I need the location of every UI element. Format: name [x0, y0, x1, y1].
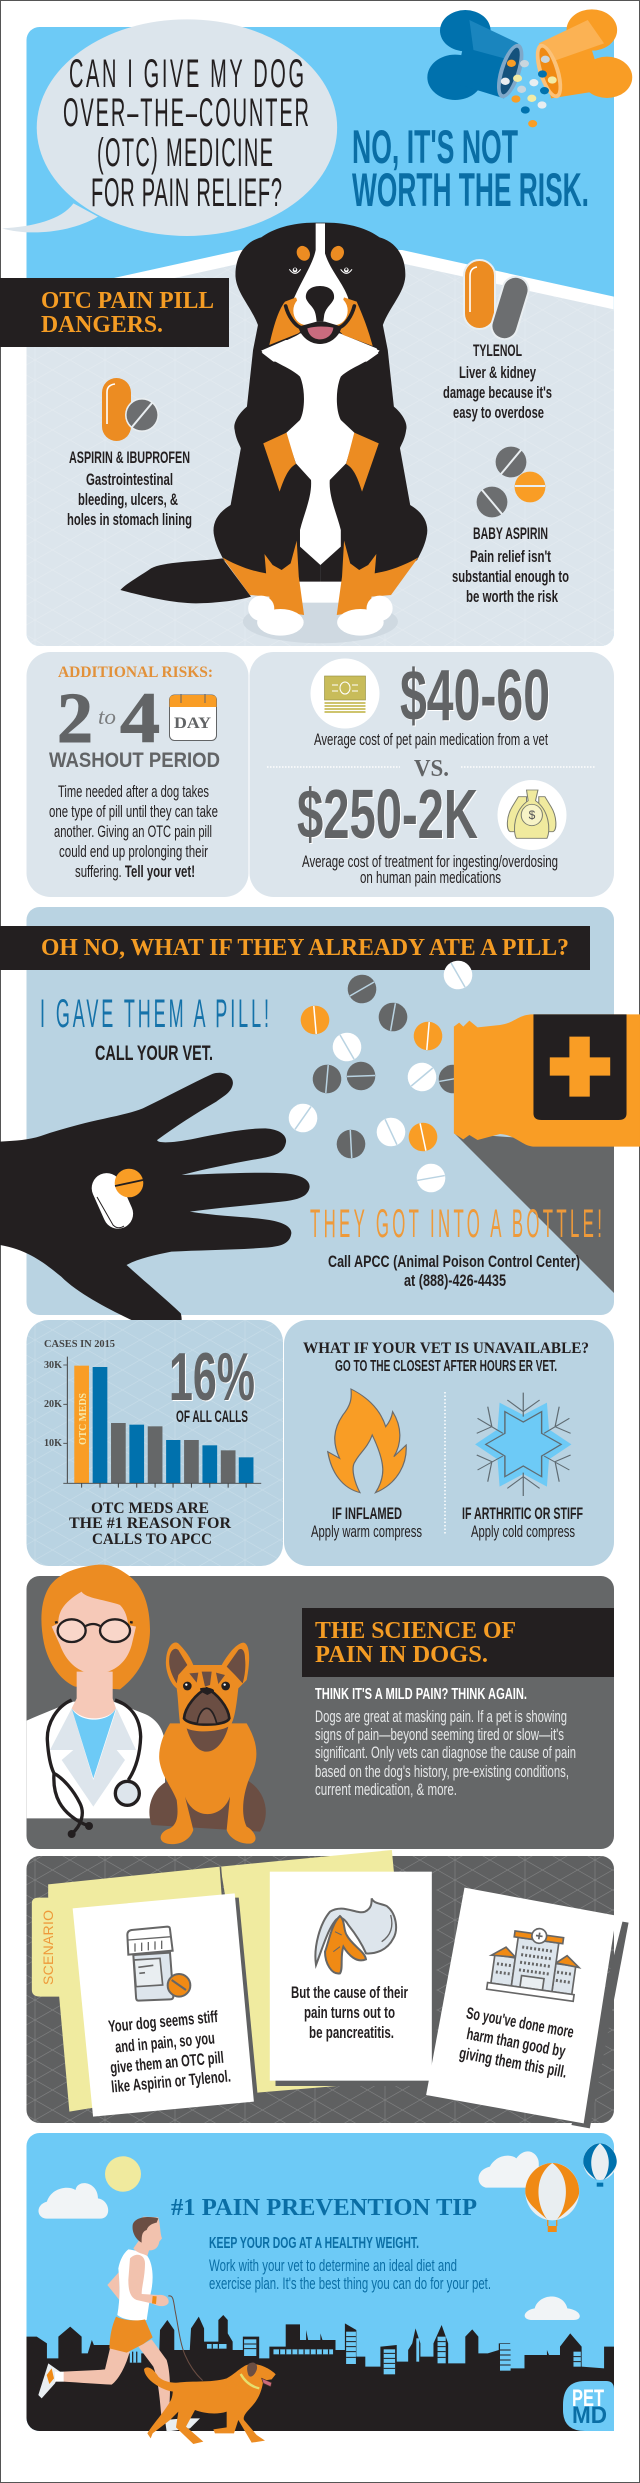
text: baby aspirin: BABY ASPIRIN: [473, 525, 548, 543]
icon: snowflake: [475, 1393, 571, 1496]
speech bubble with question: [2, 19, 337, 236]
stat: 2 to 4 day: to: [98, 704, 116, 729]
illustration: pill bottle on its side: [454, 1014, 640, 1147]
text: aspirin and ibuprofen: ASPIRIN & IBUPROFEN: [69, 449, 190, 467]
illustration: veterinarian: [27, 1565, 165, 1838]
stat: 2 to 4 day: 2: [57, 678, 93, 758]
heading: washout period: WASHOUT PERIOD: [49, 749, 220, 772]
panel: what if they already ate a pill: [0, 907, 640, 1333]
text: call APCC: [328, 1253, 580, 1290]
text: baby aspirin: be worth the risk: [466, 588, 559, 606]
stat: 40 to 60 dollars: $40-60: [400, 656, 550, 736]
stat: 2 to 4 day: 4: [120, 678, 160, 758]
stat: 2 to 4 day: DAY: [174, 715, 211, 732]
speech bubble with question: CAN I GIVE MY DOG: [69, 50, 304, 96]
text: washout description: suffering. Tell your vet!: [75, 863, 195, 881]
text: healthy weight tip: [209, 2235, 491, 2293]
icon: stomach and pancreas: [315, 1898, 396, 1973]
card: pancreatitis: But the cause of their: [291, 1984, 408, 2002]
icon: money bags: [498, 780, 566, 850]
text: Tylenol: damage because it's: [443, 384, 552, 402]
banner: OTC pain pill dangers: OTC PAIN PILL: [41, 288, 214, 314]
panel: additional risks washout period: [26, 652, 248, 897]
logo: PetMD: MD: [572, 2402, 607, 2429]
text: baby aspirin: substantial enough to: [452, 568, 569, 586]
text: Tylenol: TYLENOL: [473, 342, 522, 360]
speech bubble with question: FOR PAIN RELIEF?: [91, 169, 282, 215]
illustration: runner with dog on leash: [38, 2217, 276, 2444]
bar chart: cases in 2015: CASES IN 2015: [44, 1339, 115, 1350]
text: number one reason: THE #1 REASON FOR: [69, 1515, 232, 1532]
icon: hospital: [487, 1922, 584, 2001]
text: healthy weight tip: KEEP YOUR DOG AT A HEALTHY WEIGHT.: [209, 2235, 419, 2252]
text: treatment cost: [302, 853, 558, 887]
text: number one reason: OTC MEDS ARE: [91, 1500, 209, 1517]
speech bubble with question: OVER–THE–COUNTER: [63, 89, 309, 135]
banner: science of pain: PAIN IN DOGS.: [315, 1642, 488, 1668]
logo: PetMD: PET: [572, 2385, 604, 2412]
bar chart: cases in 2015: 30K: [44, 1360, 63, 1371]
spilled pills: [283, 955, 478, 1195]
text: healthy weight tip: Work with your vet to determine an ideal diet and: [209, 2257, 457, 2275]
panel: cost comparison: [250, 652, 614, 897]
text: washout description: [49, 783, 218, 881]
banner: OTC pain pill dangers: DANGERS.: [41, 312, 163, 338]
text: if inflamed: IF INFLAMED: [332, 1505, 402, 1523]
text: washout description: could end up prolonging their: [59, 843, 208, 861]
card: OTC pill given: [73, 1893, 258, 2117]
text: number one reason: CALLS TO APCC: [92, 1531, 212, 1548]
icon: Tylenol capsules: [464, 260, 532, 342]
stat: 16 percent: 16%: [169, 1339, 255, 1415]
banner: oh no: OH NO, WHAT IF THEY ALREADY ATE A PILL?: [41, 935, 569, 961]
speech bubble with question: (OTC) MEDICINE: [97, 129, 273, 175]
text: masking pain explanation: [315, 1686, 576, 1799]
icon: pill bottle: [127, 1927, 190, 2001]
answer headline: [352, 120, 589, 216]
card: more harm than good: So you've done more: [465, 2004, 575, 2042]
text: Tylenol: easy to overdose: [453, 404, 544, 422]
bar chart: cases in 2015: [44, 1339, 261, 1488]
shadow of bottle: [454, 1133, 614, 1293]
banner: OTC pain pill dangers: [0, 278, 229, 347]
icon: aspirin and ibuprofen pills: [102, 378, 159, 441]
text: call your vet: CALL YOUR VET.: [95, 1042, 213, 1065]
text: washout description: another. Giving an OTC pain pill: [54, 823, 212, 841]
bar chart: cases in 2015: 20K: [44, 1399, 63, 1410]
bar chart: cases in 2015: 10K: [44, 1438, 63, 1449]
banner: oh no: [0, 926, 590, 970]
banner: science of pain: [302, 1608, 614, 1677]
text: baby aspirin: [452, 525, 569, 606]
stat: 250 to 2K dollars: $250-2K: [297, 775, 478, 853]
text: Tylenol: [443, 342, 552, 422]
text: masking pain explanation: current medication, & more.: [315, 1781, 457, 1799]
illustration: hand holding pills: [0, 1073, 310, 1333]
icon: flame: [328, 1389, 406, 1493]
folder with scenario tab: [32, 1850, 408, 2112]
panel: OTC calls bar chart: [26, 1320, 283, 1566]
panel: science of pain in dogs: [26, 1565, 614, 1849]
panel: scenario: [26, 1850, 629, 2128]
icon: hot air balloons: [525, 2143, 617, 2232]
card: OTC pill given: give them an OTC pill: [109, 2049, 225, 2077]
city skyline: [24, 2315, 616, 2433]
text: baby aspirin: Pain relief isn't: [470, 548, 551, 566]
text: Tylenol: Liver & kidney: [459, 364, 537, 382]
illustration: French bulldog: [149, 1642, 266, 1844]
text: washout description: one type of pill until they can take: [49, 803, 218, 821]
card: more harm than good: harm than good by: [465, 2025, 567, 2061]
text: if arthritic or stiff: [462, 1505, 583, 1541]
heading: they got into a bottle: THEY GOT INTO A BOTTLE!: [310, 1202, 602, 1246]
card: OTC pill given: Your dog seems stiff: [107, 2008, 219, 2036]
text: aspirin and ibuprofen: [67, 449, 192, 529]
icon: cash stack: [310, 658, 380, 728]
text: washout description: Time needed after a dog takes: [58, 783, 209, 801]
logo: PetMD: [563, 2381, 614, 2431]
text: versus: VS.: [414, 756, 449, 782]
clouds: [39, 2151, 580, 2320]
heading: I gave them a pill: I GAVE THEM A PILL!: [40, 991, 269, 1036]
bar chart: cases in 2015: OTC MEDS: [78, 1393, 89, 1445]
card: pancreatitis: be pancreatitis.: [309, 2024, 394, 2042]
card: pancreatitis: pain turns out to: [304, 2004, 395, 2022]
heading: pain prevention tip: #1 PAIN PREVENTION TIP: [171, 2195, 477, 2221]
card: more harm than good: [426, 1888, 629, 2128]
card: pancreatitis: [270, 1872, 437, 2086]
text: of all calls: OF ALL CALLS: [176, 1407, 248, 1426]
card: more harm than good: giving them this pill.: [458, 2044, 568, 2082]
card: OTC pill given: like Aspirin or Tylenol.: [110, 2067, 232, 2097]
text: if inflamed: Apply warm compress: [311, 1523, 422, 1541]
panel: pain prevention tip: [24, 2133, 617, 2444]
answer headline: NO, IT'S NOT: [352, 120, 518, 173]
text: aspirin and ibuprofen: Gastrointestinal: [86, 471, 173, 489]
stat: 2 to 4 day: [57, 678, 216, 758]
folder with scenario tab: SCENARIO: [40, 1910, 56, 1985]
text: healthy weight tip: exercise plan. It's the best thing you can do for your pet.: [209, 2275, 491, 2293]
text: if arthritic or stiff: Apply cold compress: [471, 1523, 575, 1541]
icon: sun: [105, 2156, 141, 2192]
card: OTC pill given: and in pain, so you: [114, 2029, 216, 2057]
text: treatment cost: on human pain medications: [360, 869, 501, 887]
text: if inflamed: [311, 1505, 422, 1541]
icon: open bone-shaped capsule spilling pills: [427, 9, 632, 127]
text: aspirin and ibuprofen: bleeding, ulcers, &: [78, 491, 178, 509]
heading: vet unavailable: WHAT IF YOUR VET IS UNAVAILABLE?: [303, 1340, 589, 1357]
panel: vet unavailable: [284, 1320, 614, 1566]
heading: additional risks: ADDITIONAL RISKS:: [58, 664, 213, 681]
illustration: Bernese mountain dog: [120, 223, 427, 643]
banner: science of pain: THE SCIENCE OF: [315, 1618, 516, 1644]
heading: vet unavailable: [303, 1340, 589, 1375]
text: masking pain explanation: THINK IT'S A MILD PAIN? THINK AGAIN.: [315, 1686, 527, 1703]
text: number one reason: [69, 1500, 232, 1548]
icon: money bags: $: [529, 808, 536, 822]
panel: hero and OTC pill dangers: [0, 9, 632, 650]
icon: baby aspirin pills: [477, 447, 545, 517]
text: aspirin and ibuprofen: holes in stomach lining: [67, 511, 192, 529]
text: call APCC: at (888)-426-4435: [404, 1272, 506, 1290]
